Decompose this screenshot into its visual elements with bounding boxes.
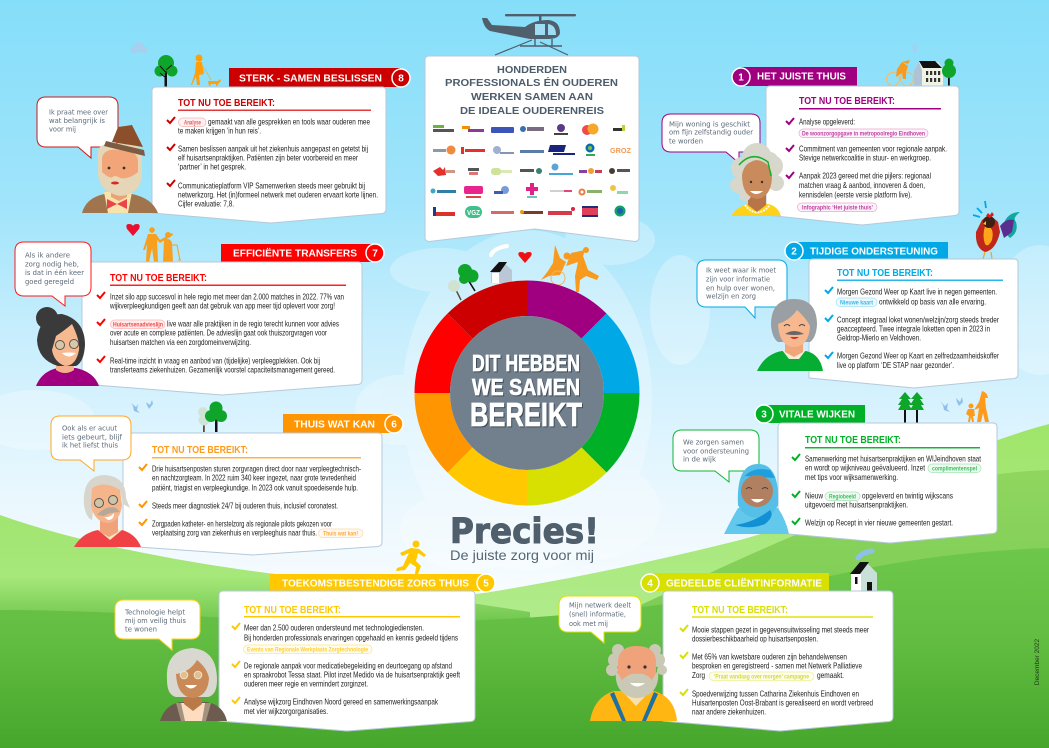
icon: woman with dog — [191, 54, 221, 86]
heading 2: TOT NU TOE BEREIKT: — [837, 268, 933, 279]
text 3: Welzijn op Recept in vier nieuwe gemeenten gestart. — [805, 518, 953, 528]
text 6: Zorgpaden katheter- en herstelzorg als regionale pilots gekozen voor — [152, 518, 332, 528]
text 6: en nachtzorgteam. In 2022 ruim 340 keer ingezet, naar grote tevredenheid — [152, 472, 356, 482]
banner 4: 4 — [647, 578, 653, 590]
banner 1 — [732, 67, 857, 86]
speech bubble 8: Ik praat mee over — [49, 108, 108, 116]
card 2 — [809, 259, 1018, 388]
icon: family — [966, 391, 989, 422]
text 4: Spoedverwijzing tussen Catharina Ziekenhuis Eindhoven en — [692, 688, 859, 698]
banner 2 — [785, 242, 948, 260]
text 1 — [786, 116, 947, 212]
text 6: verplaatsing zorg van ziekenhuis en verpleeghuis naar thuis. — [152, 528, 317, 538]
text 5: Bij honderden professionals ervaringen opgehaald en kennis gedeeld tijdens — [244, 632, 458, 642]
wheel decorations — [448, 245, 599, 300]
speech bubble 2: Ik weet waar ik moet — [706, 266, 776, 274]
card 1 — [766, 86, 959, 225]
panel 5: toekomstbestendige zorg thuis — [115, 574, 495, 731]
speech bubble 8 — [37, 97, 118, 158]
icon: trees by wheel — [448, 264, 478, 300]
icon: birds — [940, 397, 963, 412]
banner 5 — [270, 574, 495, 592]
text 3: met tips voor wijksamenwerking. — [805, 472, 898, 482]
date note: December 2022 — [1034, 638, 1041, 685]
speech bubble 7: zorg nodig heb, — [25, 260, 79, 268]
text 5 — [232, 622, 460, 716]
text 7: Huisartsenadvieslijn — [113, 322, 163, 328]
text 5: ouderen meer regie en vermindert zorginzet. — [244, 678, 368, 688]
wheel title: WE SAMEN — [472, 374, 580, 400]
speech bubble 7: is dat in één keer — [25, 269, 84, 277]
helicopter — [482, 14, 576, 55]
speech bubble 6: ik het liefst thuis — [62, 442, 118, 450]
text 2 — [825, 286, 999, 370]
heading: honderden professionals: PROFESSIONALS ÉN OUDEREN — [445, 76, 618, 89]
logo: Precies: De juiste zorg voor mij — [450, 547, 594, 563]
speech bubble 1 — [662, 114, 760, 163]
text 8: Samen beslissen aanpak uit het ziekenhuis aangepast en getetst bij — [178, 144, 368, 154]
card 5 — [219, 591, 475, 731]
speech bubble 3: We zorgen samen — [683, 438, 744, 446]
panel 8: sterk samen beslissen — [37, 54, 410, 223]
text 8: gemaakt van alle gesprekken en tools waar ouderen mee — [208, 116, 370, 126]
text 7: transferteams ziekenhuizen. Gezamenlijk voorstel capaciteitsmanagement gereed. — [110, 364, 335, 374]
heading: honderden professionals: HONDERDEN — [497, 64, 567, 76]
text 3: complimentenspel — [932, 465, 977, 472]
text 3: Regiobeeld — [829, 493, 856, 500]
speech bubble 7: goed geregeld — [25, 278, 74, 286]
speech bubble 6 — [51, 416, 131, 471]
panel: honderden professionals — [425, 56, 639, 242]
text 4: Huisartenposten Oost-Brabant is gerealiseerd en wordt verbreed — [692, 698, 873, 708]
text 1: Commitment van gemeenten voor regionale aanpak. — [799, 144, 947, 154]
text 8: netwerkzorg. Het (in)formeel netwerk met ouderen ervaart korte lijnen. — [178, 190, 378, 200]
text 4 — [680, 624, 873, 716]
character: man with hat — [82, 125, 158, 213]
speech bubble 5 — [115, 600, 200, 650]
banner 6: THUIS WAT KAN — [294, 420, 375, 430]
panel 6: thuis wat kan — [51, 400, 403, 555]
card 7 — [82, 262, 362, 395]
banner 5: 5 — [483, 578, 489, 590]
text 5: Events van Regionale Werkplaats Zorgtechnologie — [247, 646, 368, 654]
text 2: Geldrop-Mierlo en Veldhoven. — [837, 332, 921, 342]
speech bubble 8: voor mij — [49, 126, 76, 134]
heading 5: TOT NU TOE BEREIKT: — [244, 605, 341, 616]
background: clouds — [0, 215, 1049, 570]
icon: house by wheel — [490, 246, 512, 283]
character: woman with bun — [36, 307, 99, 386]
banner 7: EFFICIËNTE TRANSFERS — [233, 246, 357, 260]
icon: heart — [518, 252, 532, 263]
character: woman grey bob — [160, 648, 227, 721]
icon: birds — [131, 400, 153, 413]
character: bearded man — [590, 644, 677, 721]
heading 4: TOT NU TOE BEREIKT: — [692, 605, 788, 616]
speech bubble 2 — [697, 260, 787, 318]
banner 4: GEDEELDE CLIËNTINFORMATIE — [666, 576, 822, 590]
banner 6: 6 — [391, 420, 397, 430]
runner icon — [396, 540, 426, 574]
text 3 — [792, 454, 981, 528]
text 1: kennisdelen (eerste versie platform live). — [799, 190, 912, 200]
panel 2: tijdige ondersteuning — [697, 201, 1020, 388]
text 3: en wordt op wijkniveau geëvalueerd. Inzet — [805, 462, 925, 472]
card 3 — [778, 423, 997, 543]
text 8: Cijfer evaluatie: 7,8. — [178, 198, 234, 208]
banner 7 — [221, 244, 384, 262]
banner 1: 1 — [738, 72, 744, 84]
banner 4 — [641, 573, 829, 592]
text 6: Drie huisartsenposten sturen zorgvragen direct door naar verpleegtechnisch- — [152, 464, 361, 474]
character: woman curly hair — [730, 143, 784, 216]
text 2: live op platform ‘DE STAP naar gezonder’. — [837, 360, 954, 370]
icon: trees — [198, 402, 227, 432]
text 3: uitgevoerd met huisartsenpraktijken. — [805, 500, 908, 510]
text 6: patiënt, triagist en verpleegkundige. In 2023 ook vanuit spoedeisende hulp. — [152, 482, 358, 492]
banner 1: HET JUISTE THUIS — [757, 72, 846, 82]
heading 1: TOT NU TOE BEREIKT: — [799, 96, 895, 107]
card 6 — [123, 433, 382, 555]
logo grid — [430, 124, 632, 218]
wheel title: DIT HEBBEN — [472, 350, 580, 376]
speech bubble 7 — [15, 242, 91, 306]
speech bubble 1: Mijn woning is geschikt — [669, 120, 750, 128]
donut wheel — [414, 280, 640, 506]
text 8: ‘partner’ in het gesprek. — [178, 162, 246, 172]
text 7: Inzet silo app succesvol in hele regio met meer dan 2.000 matches in 2022. 77% van — [110, 292, 344, 302]
text 4: dossierbeschikbaarheid op huisartsenposten. — [692, 634, 818, 644]
speech bubble 7: Als ik andere — [25, 252, 70, 260]
character: woman with hijab — [724, 464, 789, 534]
text 5: Meer dan 2.500 ouderen ondersteund met technologiediensten. — [244, 622, 424, 632]
wheel title — [470, 350, 582, 433]
text 7: over acute en complexe patiënten. De advieslijn gaat ook thuiszorgvragen voor — [110, 328, 327, 338]
text 1: Aanpak 2023 gereed met drie pijlers: regionaal — [799, 170, 931, 180]
icon: small bird — [912, 43, 917, 54]
speech bubble 3: in de wijk — [683, 456, 717, 464]
banner 2: TIJDIGE ONDERSTEUNING — [810, 246, 938, 258]
character: man with moustache — [757, 299, 823, 371]
text 2: Morgen Gezond Weer op Kaart live in negen gemeenten. — [837, 286, 997, 296]
text 5: Analyse wijkzorg Eindhoven Noord gereed en samenwerkingsaanpak — [244, 696, 439, 706]
background: green hills — [0, 424, 1049, 748]
banner 8: STERK - SAMEN BESLISSEN — [239, 74, 382, 84]
heading: honderden professionals: WERKEN SAMEN AAN — [471, 91, 593, 103]
text 7: huisartsen matchen via een zorgdomeinverwijzing. — [110, 337, 251, 347]
speech bubble 5: mij om veilig thuis — [125, 617, 186, 625]
speech bubble 2: en hulp over wonen, — [706, 284, 775, 292]
icon: tree — [154, 55, 178, 87]
text 4: naar andere ziekenhuizen. — [692, 706, 766, 716]
character: man with glasses — [74, 475, 141, 547]
panel 7: efficiente transfers — [15, 224, 384, 395]
wheel title: BEREIKT — [470, 396, 582, 433]
speech bubble 1: om fijn zelfstandig ouder — [669, 128, 753, 136]
banner 7: 7 — [372, 248, 378, 260]
text 4: besproken en geregistreerd - samen met Netwerk Palliatieve — [692, 660, 862, 670]
speech bubble 4: ook met mij — [569, 620, 608, 628]
logo grid: VGZ — [467, 210, 481, 217]
text 2: Nieuwe kaart — [840, 299, 874, 306]
speech bubble 4: (snel) informatie, — [569, 610, 626, 618]
panel 1: het juiste thuis — [662, 58, 959, 225]
speech bubble 2: welzijn en zorg — [706, 292, 756, 300]
text 2: Concept integraal loket wonen/welzijn/zorg steeds breder — [837, 314, 999, 324]
icon: couple walking — [143, 227, 181, 262]
icon: heart — [126, 224, 140, 236]
text 2: ontwikkeld op basis van alle ervaring. — [879, 296, 986, 306]
icon: rooster — [973, 201, 1020, 259]
banner 8: 8 — [398, 74, 404, 84]
text 8: elf huisartsenpraktijken. Patiënten zijn beter voorbereid en meer — [178, 152, 358, 162]
text 8: Analyse — [184, 120, 201, 126]
speech bubble 4 — [559, 596, 641, 643]
speech bubble 6: Ook als er acuut — [62, 424, 117, 432]
text 8 — [167, 116, 378, 208]
text 6: Thuis wat kan! — [323, 530, 358, 538]
card 4 — [663, 591, 893, 731]
banner 2: 2 — [791, 246, 797, 258]
text 4: gemaakt. — [817, 670, 844, 680]
text 7: wijkverpleegkundigen geeft aan dat gebruik van app meer tijd oplevert voor zorg! — [109, 300, 335, 310]
icon: cyclist — [886, 60, 914, 86]
logo grid: GROZ — [610, 148, 632, 155]
text 4: Mooie stappen gezet in gegevensuitwisseling met steeds meer — [692, 624, 869, 634]
banner 5: TOEKOMSTBESTENDIGE ZORG THUIS — [282, 578, 469, 590]
text 7 — [97, 292, 344, 374]
text 5: en spraakrobot Tessa staat. Pilot inzet Medido via de huisartsenpraktijk geeft — [244, 670, 460, 680]
text 4: Zorg — [692, 670, 705, 680]
banner 3 — [755, 405, 865, 423]
icon: two trees — [898, 392, 924, 423]
heading 7: TOT NU TOE BEREIKT: — [110, 273, 207, 284]
text 2: geaccepteerd. Twee integrale loketten open in 2023 in — [837, 324, 990, 334]
panel 4: gedeelde clientinformatie — [559, 551, 893, 731]
banner 6 — [283, 414, 403, 433]
text 5: De regionale aanpak voor medicatiebegeleiding en deurtoegang op afstand — [244, 660, 452, 670]
speech bubble 3 — [673, 430, 759, 482]
text 1: Infographic ‘Het juiste thuis’ — [802, 204, 873, 211]
text 7: live waar alle praktijken in de regio terecht kunnen voor advies — [167, 318, 339, 328]
text 3: Samenwerking met huisartsenpraktijken en WIJeindhoven staat — [805, 454, 981, 464]
text 3: opgeleverd en twintig wijkscans — [862, 490, 953, 500]
text 4: ‘Praat vandaag over morgen’ campagne — [714, 673, 809, 680]
text 1: Analyse opgeleverd: — [799, 116, 855, 126]
banner 8 — [229, 68, 410, 87]
speech bubble 5: te wonen — [125, 626, 157, 634]
banner 3: 3 — [761, 410, 767, 420]
speech bubble 6: iets gebeurt, blijf — [62, 434, 123, 442]
text 7: Real-time inzicht in vraag en aanbod van (tijdelijke) verpleegplekken. Ook bij — [110, 356, 320, 366]
panel 3: vitale wijken — [673, 391, 997, 543]
text 4: Met 65% van kwetsbare ouderen zijn behandelwensen — [692, 652, 847, 662]
card 8 — [152, 87, 386, 223]
logo: Precies: Precies! — [450, 512, 599, 552]
speech bubble 4: Mijn netwerk deelt — [569, 602, 631, 610]
text 1: matchen vraag & aanbod, innoveren & doen, — [799, 180, 925, 190]
text 8: te maken krijgen ‘in hun reis’. — [178, 126, 261, 136]
heading 6: TOT NU TOE BEREIKT: — [152, 445, 248, 456]
icon: small cloud — [130, 42, 148, 54]
text 3: Nieuw — [805, 490, 824, 500]
text 6: Steeds meer diagnostiek 24/7 bij ouderen thuis, inclusief coronatest. — [152, 500, 338, 510]
heading 3: TOT NU TOE BEREIKT: — [805, 435, 901, 446]
speech bubble 3: voor ondersteuning — [683, 448, 749, 456]
icon: house and tree — [914, 58, 956, 86]
text 1: Stevige netwerkcoalitie in stuur- en werkgroep. — [799, 152, 931, 162]
banner 3: VITALE WIJKEN — [779, 410, 855, 420]
speech bubble 8: wat belangrijk is — [49, 117, 105, 125]
speech bubble 5: Technologie helpt — [124, 608, 185, 616]
heading: honderden professionals — [445, 64, 618, 117]
speech bubble 1: te worden — [669, 138, 703, 146]
heading: honderden professionals: DE IDEALE OUDERENREIS — [460, 105, 604, 117]
text 6 — [139, 464, 363, 538]
text 5: met vier wijkzorgorganisaties. — [244, 706, 328, 716]
text 8: Communicatieplatform VIP Samenwerken steeds meer gebruikt bij — [178, 180, 365, 190]
icon: wheelchair and runner — [541, 245, 599, 292]
text 1: De woonzorgopgave in metropoolregio Eindhoven — [802, 130, 925, 137]
heading 8: TOT NU TOE BEREIKT: — [178, 98, 275, 109]
icon: house with smoke — [850, 551, 877, 591]
speech bubble 2: zijn voor informatie — [706, 276, 770, 284]
